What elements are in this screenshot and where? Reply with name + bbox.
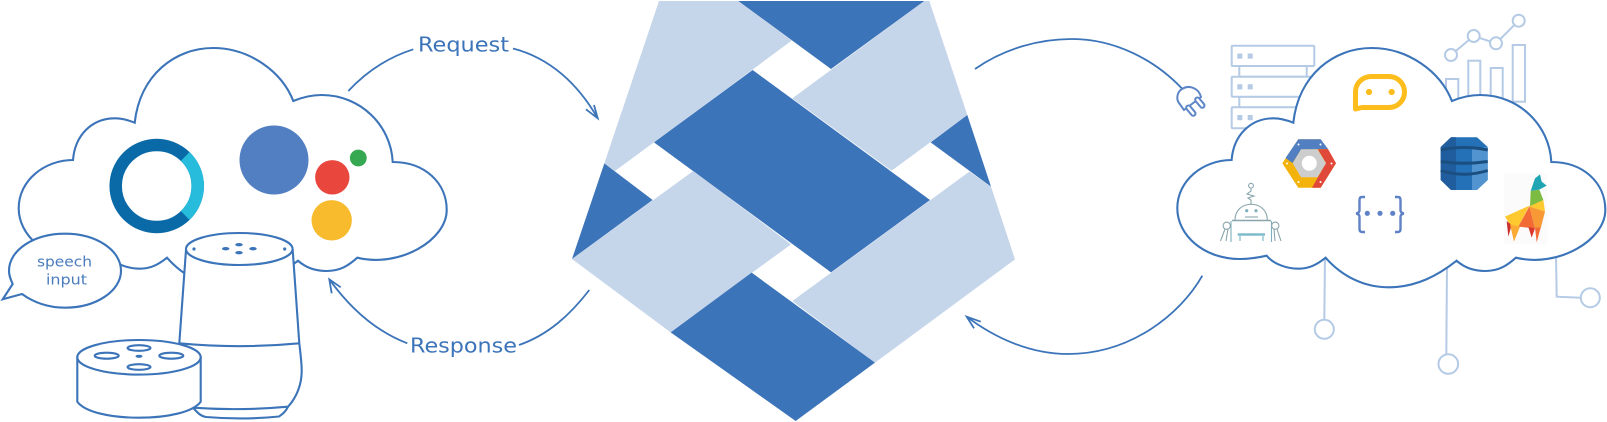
icon: Amazon Echo Dot [77,340,201,418]
arrow: response [329,279,589,345]
icon: curly braces with dots [1356,197,1404,232]
icon: server rack [1232,46,1314,128]
arrow: response from cloud [967,276,1202,354]
icon: Google Assistant dots [240,126,367,240]
text: speech input: speech [37,254,92,270]
icon: Google Cloud hexagon [1282,139,1336,188]
text: speech input: input [46,272,88,288]
icon: Alexa ring [116,145,198,227]
central logo: woven diamond [572,1,1015,421]
icon: llama [1504,173,1547,244]
icon: chat bot bubble [1356,76,1404,109]
speech bubble [3,234,121,308]
arrow: request [348,48,598,118]
icon: Google Home speaker [179,233,302,418]
label: Request: Request [418,33,509,57]
icon: robot [1220,183,1281,242]
left cloud: voice assistants [19,48,447,287]
icon: bar and line chart [1445,15,1525,102]
right cloud: backend services [1177,48,1605,287]
label: Response: Response [410,333,517,357]
icon: plug [1177,87,1205,117]
icon: DynamoDB [1441,137,1488,190]
connector pins [1315,255,1600,374]
arrow: plug line to the cloud [975,39,1182,88]
